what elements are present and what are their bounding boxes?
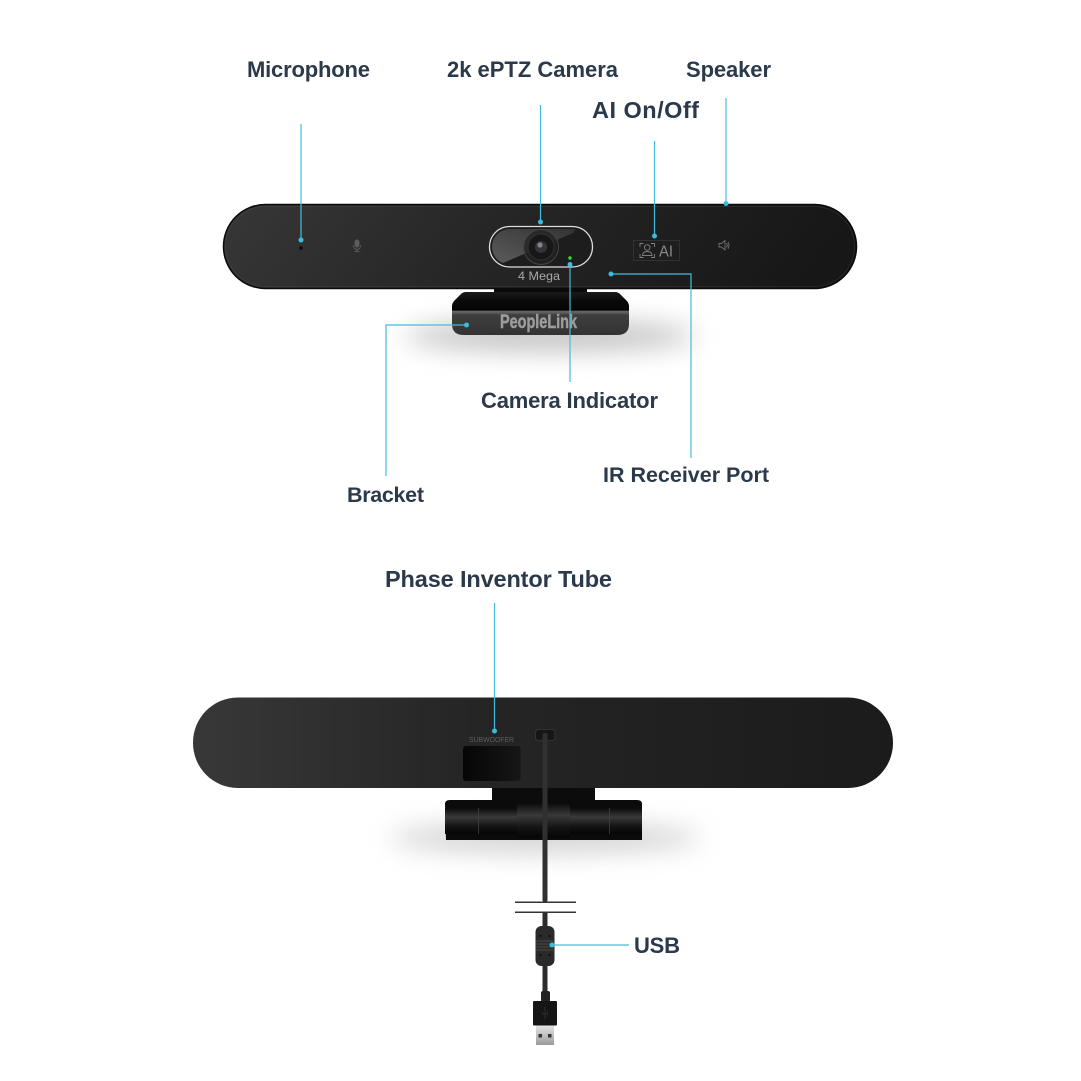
lens glass sheen — [490, 229, 576, 263]
microphone hole — [299, 246, 303, 250]
callout: AI toggle — [592, 97, 699, 238]
callout: camera — [447, 57, 619, 224]
label: IR receiver: IR Receiver Port — [603, 463, 769, 487]
callout: speaker — [686, 57, 771, 206]
camera lens — [524, 230, 558, 264]
label: microphone: Microphone — [247, 57, 370, 82]
icon: speaker — [719, 240, 729, 250]
label: USB: USB — [634, 933, 680, 958]
bracket logo: PeopleLink — [500, 312, 577, 333]
bar inner highlight — [226, 206, 854, 286]
label: camera indicator: Camera Indicator — [481, 388, 658, 413]
callout: IR receiver — [603, 272, 769, 487]
rear webcam — [193, 698, 893, 1045]
label: speaker: Speaker — [686, 57, 771, 82]
callout: phase inventor tube — [385, 566, 612, 734]
front bar body — [224, 204, 856, 288]
subwoofer port — [463, 746, 520, 781]
icon: microphone — [354, 240, 360, 252]
camera pill — [490, 226, 592, 267]
icon: AI button — [634, 240, 680, 260]
subwoofer label: SUBWOOFER — [469, 735, 515, 744]
callout: microphone — [247, 57, 370, 242]
camera indicator led — [568, 256, 572, 260]
USB plug — [533, 991, 557, 1045]
label: bracket: Bracket — [347, 483, 424, 507]
cable break marks — [515, 902, 576, 903]
rear shadow — [390, 824, 700, 852]
callout: USB — [550, 933, 680, 958]
USB cable — [515, 733, 576, 1045]
callout: camera indicator — [481, 262, 658, 413]
ferrite bead — [536, 926, 554, 966]
front webcam — [224, 204, 856, 351]
megapixel text: 4 Mega — [518, 271, 561, 283]
rear bar body — [193, 698, 893, 788]
label: camera: 2k ePTZ Camera — [447, 57, 619, 82]
cable port — [536, 730, 555, 740]
label: phase inventor tube: Phase Inventor Tube — [385, 566, 612, 592]
rear bracket — [445, 785, 642, 840]
label: AI toggle: AI On/Off — [592, 97, 699, 123]
callout: bracket — [347, 322, 469, 507]
icon: AI button: AI — [659, 244, 673, 260]
front bracket — [452, 287, 629, 335]
bracket shadow — [405, 321, 695, 351]
